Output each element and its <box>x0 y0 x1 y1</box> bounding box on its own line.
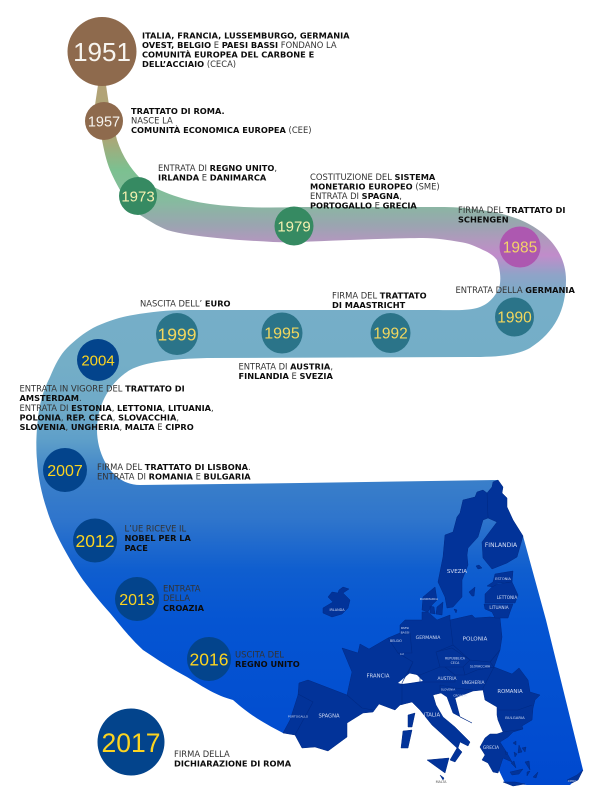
year 1979 <box>274 206 314 246</box>
text 1973: IRLANDA <box>158 172 200 182</box>
text 1951: (CECA) <box>207 59 236 69</box>
text 2004: POLONIA <box>20 412 61 422</box>
text 1995: FINLANDIA <box>238 371 289 381</box>
map: country labels: FRANCIA <box>367 674 390 680</box>
map: country labels: BULGARIA <box>505 715 525 720</box>
year 2007: 2007 <box>47 463 83 480</box>
map: country labels: ROMANIA <box>497 689 523 695</box>
map: Finland <box>482 480 523 569</box>
year 1999: 1999 <box>158 324 196 344</box>
year 2012 <box>73 518 117 562</box>
map: country labels: LU <box>400 652 404 656</box>
text 2017: DICHIARAZIONE DI ROMA <box>174 759 292 769</box>
map of the European Union <box>283 480 583 786</box>
map: country labels: GERMANIA <box>416 635 441 641</box>
text 1973: E DANIMARCA <box>202 172 266 182</box>
year 2007 <box>43 448 87 492</box>
map: Sweden <box>438 490 488 608</box>
year 1995: 1995 <box>264 326 300 342</box>
map: country labels: REPUBBLICA <box>445 656 466 660</box>
map: Switzerland gap <box>398 673 423 684</box>
map: country labels: PAESI <box>401 626 409 630</box>
text 2004: ENTRATA DI <box>20 403 71 413</box>
map: country labels: SVEZIA <box>447 569 467 575</box>
map: country labels: CROAZIA <box>453 694 468 698</box>
text 1957: (CEE) <box>289 125 312 135</box>
map: country labels: SLOVENIA <box>441 688 455 692</box>
year 2016: 2016 <box>190 650 228 670</box>
year 2004 <box>77 339 119 381</box>
year 1985: 1985 <box>503 240 537 256</box>
text 1992: DI MAASTRICHT <box>332 300 406 310</box>
year 1999 <box>156 313 198 355</box>
year 2012: 2012 <box>76 531 114 551</box>
text 2016: REGNO UNITO <box>235 659 300 669</box>
year 1957: 1957 <box>88 114 120 130</box>
year 1973 <box>119 177 157 215</box>
map: national borders <box>295 620 532 735</box>
text 2004: TRATTATO DI <box>125 384 185 394</box>
text 1973: ENTRATA DI <box>158 163 210 173</box>
map: Aegean islands and Crete <box>503 741 538 786</box>
year 1990: 1990 <box>497 310 532 326</box>
map: country labels: CECA <box>451 661 460 665</box>
text 2012: PACE <box>124 543 148 553</box>
text 1979: MONETARIO EUROPEO <box>310 182 413 192</box>
map: Latvia <box>485 582 518 603</box>
text 1999: NASCITA DELL’ EURO <box>140 298 231 308</box>
text 2013: CROAZIA <box>163 603 205 613</box>
text 2012: NOBEL PER LA <box>124 533 192 543</box>
text 2013: DELLA <box>163 593 190 603</box>
map: country labels: ESTONIA <box>495 577 511 581</box>
map: Estonia <box>487 571 513 587</box>
map: country labels: LETTONIA <box>497 595 517 600</box>
text 1979: SISTEMA <box>395 172 436 182</box>
map: mainland Europe <box>283 612 540 773</box>
year 2004: 2004 <box>81 352 115 370</box>
text 1979: SPAGNA, <box>362 191 402 201</box>
text 2004: , UNGHERIA, MALTA E CIPRO <box>66 422 194 432</box>
year 2013 <box>115 577 159 621</box>
text 1985: FIRMA DEL <box>458 205 506 215</box>
text 1957: COMUNITÀ ECONOMICA EUROPEA <box>131 124 287 135</box>
map: country labels: AUSTRIA <box>437 676 457 682</box>
text 1979: ENTRATA DI <box>310 191 362 201</box>
map: country labels: FINLANDIA <box>485 542 518 549</box>
text 1979: COSTITUZIONE DEL <box>310 172 395 182</box>
map: country labels: BELGIO <box>390 639 402 643</box>
map: country labels: DANIMARCA <box>420 597 439 601</box>
text 1951: OVEST, BELGIO <box>142 40 211 50</box>
text 2004: AMSTERDAM <box>20 393 79 403</box>
year 2016 <box>187 637 231 681</box>
map: Denmark <box>422 587 443 615</box>
text 1990: ENTRATA DELLA GERMANIA <box>456 285 575 295</box>
map: country labels: BASSI <box>401 630 410 634</box>
map: Baltic islands <box>454 565 482 613</box>
text 1957: NASCE LA <box>131 116 173 126</box>
year 1990 <box>495 298 534 336</box>
year 1979: 1979 <box>277 218 311 236</box>
text 2012: L’UE RICEVE IL <box>124 524 186 534</box>
text 2004: ESTONIA, LETTONIA, LITUANIA, <box>71 403 214 413</box>
map: country labels: GRECIA <box>483 745 499 751</box>
year 1957 <box>85 102 123 140</box>
map: country labels: SLOVACCHIA <box>470 664 491 668</box>
text 1979: E GRECIA <box>375 200 417 210</box>
year 2017 <box>98 708 164 776</box>
text 2007: ENTRATA DI <box>97 472 149 482</box>
text 1951: E PAESI BASSI FONDANO LA <box>214 40 337 50</box>
map: country labels: UNGHERIA <box>462 680 484 686</box>
map: Cyprus <box>567 770 583 783</box>
year 1985 <box>500 226 540 268</box>
map: Ireland <box>323 587 350 617</box>
text 2004: SLOVENIA <box>20 422 66 432</box>
year 1992: 1992 <box>373 326 408 342</box>
map: country labels: CIPRO <box>568 779 577 783</box>
text 1995: AUSTRIA, <box>290 362 333 372</box>
year 1951: 1951 <box>73 37 131 67</box>
year 1951 <box>68 17 136 86</box>
map: country labels: MALTA <box>436 780 447 784</box>
text 2007: TRATTATO DI LISBONA. <box>145 462 251 472</box>
text 2004: . <box>79 393 82 403</box>
text 1951: DELL’ACCIAIO <box>142 59 204 69</box>
text 2016: USCITA DEL <box>235 650 284 660</box>
map: country labels <box>288 542 577 784</box>
map: Lithuania <box>484 604 513 618</box>
text 2007: FIRMA DEL <box>97 462 145 472</box>
map: country labels: IRLANDA <box>329 608 345 612</box>
text 1985: SCHENGEN <box>458 214 509 224</box>
text 1992: TRATTATO <box>380 290 427 300</box>
text 2013: ENTRATA <box>163 584 201 594</box>
text 1979: (SME) <box>415 182 440 192</box>
text 1985: TRATTATO DI <box>506 205 565 215</box>
map: country labels: POLONIA <box>463 636 488 642</box>
text 1951: ITALIA, FRANCIA, LUSSEMBURGO, GERMANIA <box>142 30 350 40</box>
text 2017: FIRMA DELLA <box>174 749 230 759</box>
year 2017: 2017 <box>102 728 160 758</box>
text 1992: FIRMA DEL <box>332 290 380 300</box>
text 2004: , REP. CECA, SLOVACCHIA, <box>61 412 179 422</box>
text 2004: ENTRATA IN VIGORE DEL <box>20 384 125 394</box>
text 2007: ROMANIA E BULGARIA <box>149 472 251 482</box>
map: country labels: SPAGNA <box>318 714 340 720</box>
year 1992 <box>370 313 410 353</box>
text 1979: PORTOGALLO <box>310 200 372 210</box>
map: country labels: ITALIA <box>424 712 440 718</box>
year 1973: 1973 <box>121 188 155 206</box>
map: Mediterranean islands <box>401 713 449 780</box>
timeline ribbon <box>36 85 583 785</box>
year 1995 <box>262 312 302 354</box>
map: country labels: LITUANIA <box>489 605 509 610</box>
text 1995: E SVEZIA <box>292 371 333 381</box>
text 1995: ENTRATA DI <box>238 362 290 372</box>
text 1973: REGNO UNITO, <box>210 163 277 173</box>
text 1957: TRATTATO DI ROMA. <box>131 106 225 116</box>
text 1951: COMUNITÀ EUROPEA DEL CARBONE E <box>142 48 315 60</box>
year 2013: 2013 <box>119 592 155 609</box>
map: country labels: PORTOGALLO <box>288 714 309 718</box>
